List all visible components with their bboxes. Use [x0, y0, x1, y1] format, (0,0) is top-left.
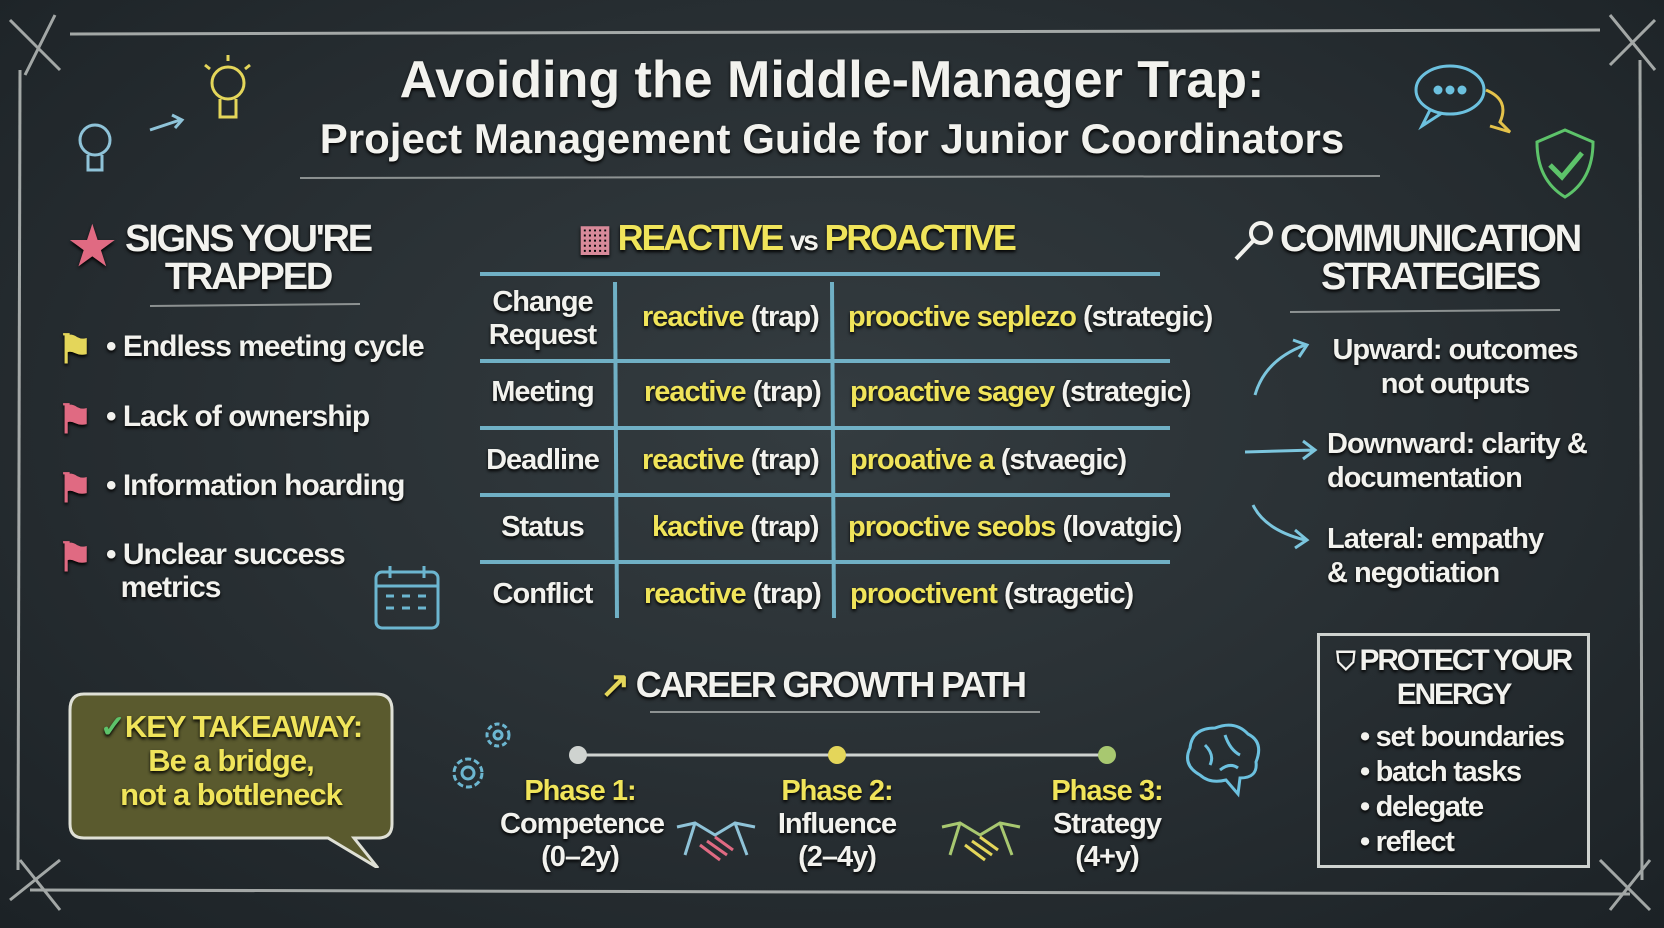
heading: career growth path: ↗ CAREER GROWTH PATH	[600, 664, 1025, 705]
list	[1360, 721, 1565, 858]
table: reactive vs proactive	[480, 272, 1214, 618]
bullet list: • Unclear success	[106, 538, 345, 571]
list: • reflect	[1360, 826, 1454, 858]
timeline: Competence	[500, 808, 664, 840]
callout: key takeaway	[68, 692, 394, 868]
table: reactive vs proactive: reactive (trap)	[642, 301, 819, 333]
icon: star: ★	[69, 218, 115, 276]
table: reactive vs proactive: reactive (trap)	[644, 376, 821, 408]
takeaway text: ✓KEY TAKEAWAY:	[100, 709, 362, 744]
table: reactive vs proactive: kactive (trap)	[652, 511, 819, 543]
heading: ⛉ PROTECT YOUR	[1336, 644, 1571, 677]
strategy items: Upward: outcomes	[1332, 334, 1578, 366]
panel: communication strategies: Lateral: empathy	[1327, 523, 1543, 555]
timeline: (4+y)	[1075, 841, 1139, 873]
bullet list: metrics	[121, 571, 220, 604]
bullet list	[57, 328, 425, 604]
list: • batch tasks	[1360, 756, 1521, 788]
timeline: Influence	[778, 808, 896, 840]
panel: protect your energy	[1317, 633, 1590, 868]
timeline: (0–2y)	[541, 841, 619, 873]
title: Avoiding the Middle-Manager Trap:	[400, 51, 1264, 109]
icon: calendar	[374, 566, 440, 630]
bullet list: • Information hoarding	[106, 469, 404, 502]
icon: light bulbs with arrow	[78, 55, 251, 172]
table: reactive vs proactive: Request	[489, 319, 596, 351]
bullet list: ⚑	[57, 328, 92, 372]
table: reactive vs proactive: Meeting	[491, 376, 594, 408]
heading	[125, 218, 373, 298]
table: reactive vs proactive: Change	[492, 286, 593, 318]
table: reactive vs proactive: prooctive seobs (lovatgic)	[848, 511, 1181, 543]
icon: brain	[1186, 724, 1260, 798]
timeline: Phase 2:	[781, 775, 893, 807]
heading: COMMUNICATION	[1280, 218, 1580, 260]
list: • delegate	[1360, 791, 1483, 823]
takeaway text: Be a bridge,	[148, 743, 314, 778]
table: reactive vs proactive: Deadline	[486, 444, 599, 476]
heading: SIGNS YOU'RE	[125, 218, 371, 260]
strategy items: not outputs	[1381, 368, 1529, 400]
subtitle: Project Management Guide for Junior Coordinators	[320, 115, 1344, 162]
bullet list: • Lack of ownership	[106, 400, 369, 433]
timeline: Phase 1:	[524, 775, 636, 807]
icon: handshakes	[676, 821, 756, 862]
bullet list: • Endless meeting cycle	[106, 330, 424, 363]
timeline: Phase 3:	[1051, 775, 1163, 807]
icon: shield check	[1536, 128, 1594, 199]
takeaway text	[100, 709, 362, 812]
heading: ENERGY	[1397, 678, 1510, 711]
panel: communication strategies	[1234, 218, 1588, 592]
panel: signs you're trapped	[57, 218, 425, 604]
panel: communication strategies: documentation	[1327, 462, 1522, 494]
bullet list: ⚑	[57, 398, 92, 442]
table: reactive vs proactive: prooative a (stvaegic)	[850, 444, 1126, 476]
heading	[1280, 218, 1581, 298]
heading: TRAPPED	[165, 256, 331, 298]
icon: chat bubbles	[1414, 64, 1511, 134]
bullet list: ⚑	[57, 467, 92, 511]
arrows	[1245, 338, 1318, 550]
panel: communication strategies: & negotiation	[1327, 557, 1499, 589]
table: reactive vs proactive: proactive sagey (strategic)	[850, 376, 1190, 408]
timeline: Strategy	[1053, 808, 1161, 840]
heading: STRATEGIES	[1321, 256, 1539, 298]
panel: communication strategies: Downward: clarity &	[1327, 428, 1587, 460]
takeaway text: not a bottleneck	[120, 777, 342, 812]
table: reactive vs proactive: Status	[501, 511, 584, 543]
icon: gears	[452, 722, 510, 788]
timeline: (2–4y)	[798, 841, 876, 873]
table: reactive vs proactive: reactive (trap)	[644, 578, 821, 610]
table: reactive vs proactive: prooctive seplezo (strategic)	[848, 301, 1212, 333]
heading	[1335, 644, 1573, 711]
table: reactive vs proactive: prooctivent (stragetic)	[850, 578, 1133, 610]
heading: reactive vs proactive: ▦ REACTIVE vs PROACTIVE	[578, 217, 1015, 258]
table: reactive vs proactive: Conflict	[493, 578, 592, 610]
list: • set boundaries	[1360, 721, 1564, 753]
table: reactive vs proactive: reactive (trap)	[642, 444, 819, 476]
bullet list: ⚑	[57, 536, 92, 580]
strategy items	[1332, 334, 1578, 402]
timeline	[500, 746, 1163, 876]
icon: key	[1234, 221, 1273, 260]
